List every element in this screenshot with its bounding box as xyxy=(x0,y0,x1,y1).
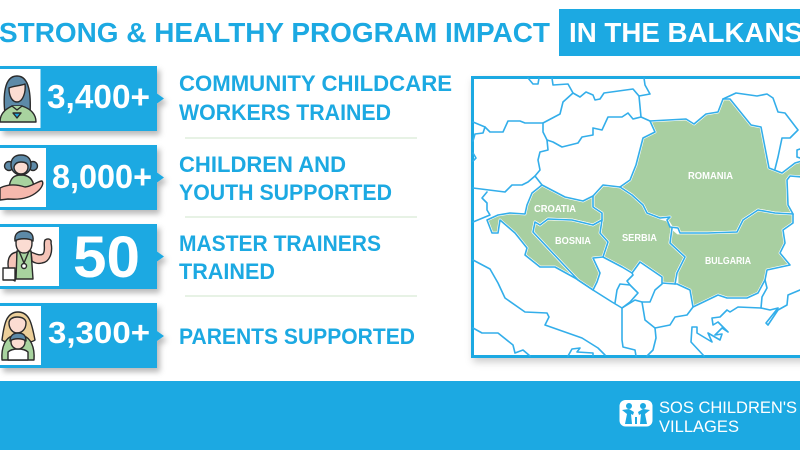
country labels: ROMANIA xyxy=(688,171,733,182)
country: Bulgaria xyxy=(670,210,793,307)
label: parents supported: PARENTS SUPPORTED xyxy=(179,324,415,349)
icon: muscular trainer with whistle xyxy=(3,231,52,281)
label: community childcare workers trained: COMMUNITY CHILDCARE xyxy=(179,71,452,96)
country labels xyxy=(534,171,751,267)
icon: parent with child xyxy=(2,312,35,360)
stat card 1 xyxy=(0,66,164,131)
number 8,000+: 8,000+ xyxy=(52,158,152,195)
label: community childcare workers trained xyxy=(179,71,452,125)
country: Bosnia xyxy=(533,219,608,290)
country labels: CROATIA xyxy=(534,204,576,215)
stat card 3 xyxy=(0,224,164,289)
label: children and youth supported xyxy=(179,152,392,205)
label: children and youth supported: CHILDREN AND xyxy=(179,152,346,177)
title highlight: in the Balkans xyxy=(559,9,800,56)
panel: master trainers xyxy=(0,224,381,290)
panel: parents supported xyxy=(0,303,415,368)
number 50: 50 xyxy=(73,225,140,290)
country: Serbia xyxy=(593,185,685,284)
label: community childcare workers trained: WORKERS TRAINED xyxy=(179,100,391,125)
logo wordmark xyxy=(659,398,797,436)
label: master trainers trained: TRAINED xyxy=(179,259,275,284)
country: Romania xyxy=(620,99,800,233)
logo mark xyxy=(620,400,652,426)
title highlight: in the Balkans: IN THE BALKANS xyxy=(569,17,800,48)
stat card 4 xyxy=(0,303,164,368)
panel: community childcare workers xyxy=(0,66,452,131)
logo: SOS Children's Villages xyxy=(620,398,797,436)
label: master trainers trained: MASTER TRAINERS xyxy=(179,231,381,256)
title: STRONG & HEALTHY PROGRAM IMPACT xyxy=(0,17,550,48)
country borders xyxy=(473,78,800,356)
logo wordmark: VILLAGES xyxy=(659,417,739,436)
icon: woman childcare worker xyxy=(0,76,36,122)
map of the Balkans xyxy=(472,78,800,356)
map frame xyxy=(472,78,800,356)
stat card 2 xyxy=(0,145,164,210)
number 3,400+: 3,400+ xyxy=(47,78,150,115)
icon: child held in a hand xyxy=(0,155,43,200)
country: Croatia xyxy=(487,185,602,290)
footer band xyxy=(0,381,800,450)
country labels: BOSNIA xyxy=(555,236,591,247)
label: children and youth supported: YOUTH SUPPORTED xyxy=(179,180,392,205)
logo wordmark: SOS CHILDREN'S xyxy=(659,398,797,417)
label: master trainers trained xyxy=(179,231,381,284)
panel: children and youth xyxy=(0,145,392,210)
country labels: BULGARIA xyxy=(705,256,751,267)
country labels: SERBIA xyxy=(622,233,657,244)
number 3,300+: 3,300+ xyxy=(48,315,150,350)
